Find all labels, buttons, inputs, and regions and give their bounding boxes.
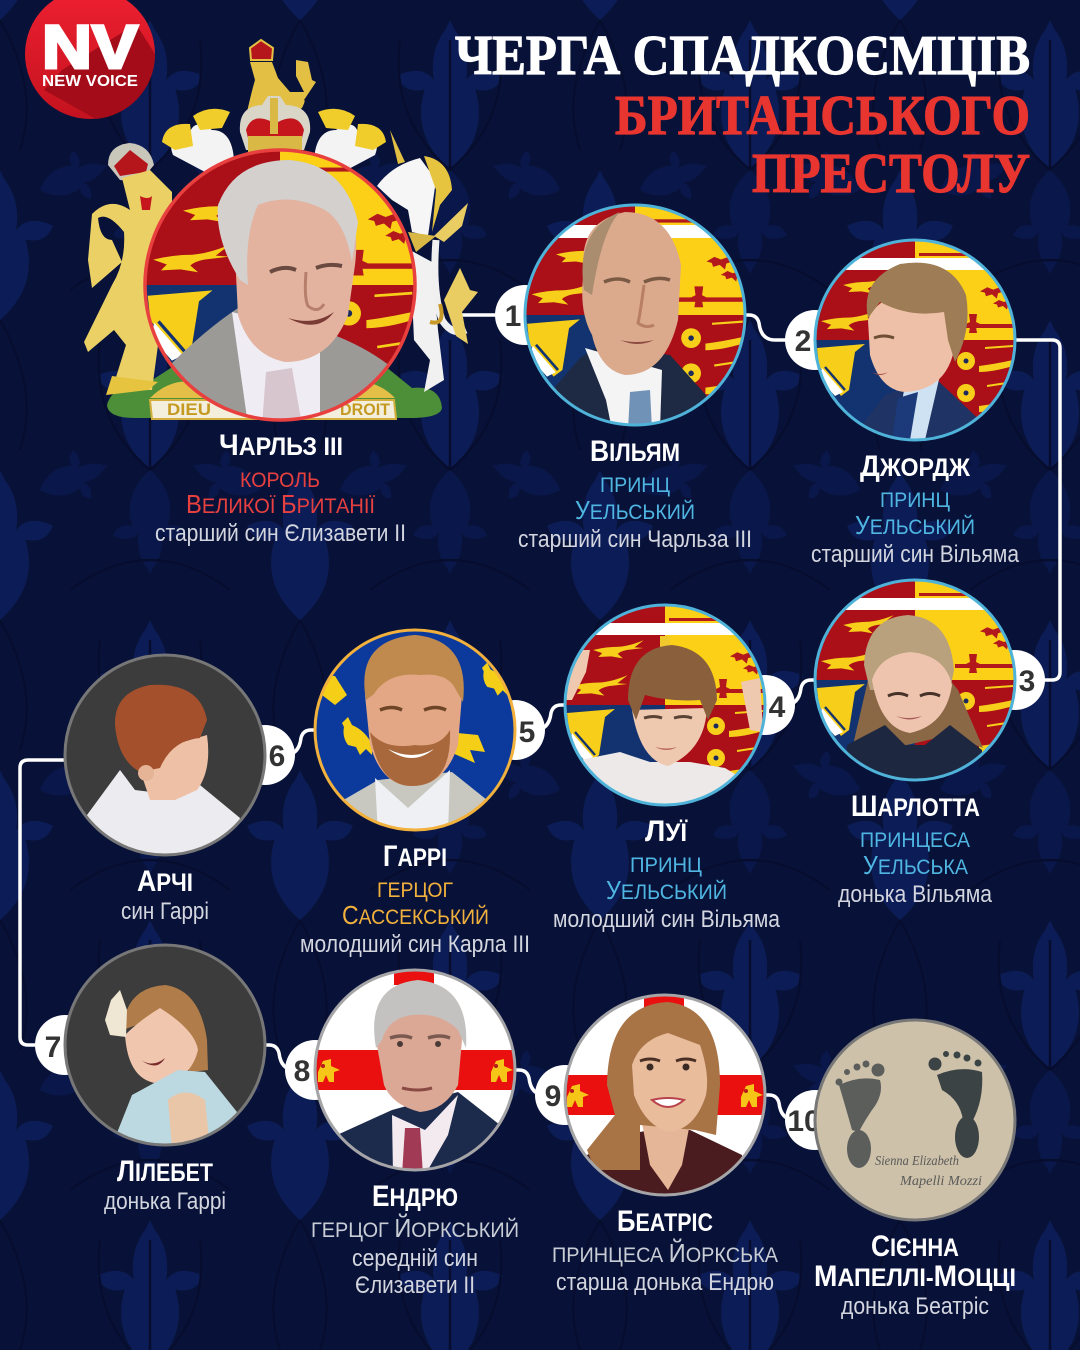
number badge 9: 9: [545, 1080, 561, 1113]
crest lion and crown: [240, 40, 316, 152]
person 10: Sienna: [785, 1020, 1016, 1320]
number badge 6: 6: [269, 740, 285, 773]
description: Andrew: [352, 1245, 478, 1299]
name: Charlotte: ШАРЛОТТА: [851, 790, 980, 823]
person 9: Beatrice: [535, 995, 779, 1296]
number badge 4: [735, 675, 795, 735]
ring: Archie: [65, 655, 265, 855]
role: William: ПРИНЦ: [600, 473, 670, 497]
logo: NV New Voice: NEW VOICE: [42, 73, 138, 90]
number badge 4: 4: [769, 691, 786, 724]
description: Louis: молодший син Вільяма: [553, 906, 781, 933]
role: Harry: САССЕКСЬКИЙ: [342, 902, 489, 930]
role: Charlotte: [860, 828, 971, 880]
role: Louis: ПРИНЦ: [630, 853, 702, 877]
description: Sienna: донька Беатріс: [841, 1293, 989, 1320]
name: William: ВІЛЬЯМ: [590, 435, 680, 468]
ring: William: [525, 205, 745, 425]
number badge 9: [535, 1065, 595, 1125]
role: William: УЕЛЬСЬКИЙ: [575, 497, 695, 525]
name: Sienna: МАПЕЛЛІ-МОЦЦІ: [814, 1260, 1016, 1293]
name: Archie: АРЧІ: [137, 865, 193, 898]
number badge 8: 8: [294, 1055, 310, 1088]
number badge 5: 5: [519, 716, 535, 749]
logo: NV New Voice: NV: [42, 13, 138, 81]
ring: Beatrice: [565, 995, 765, 1195]
person 4: Louis: [553, 605, 795, 933]
description: Andrew: середній син: [352, 1245, 478, 1272]
number badge 5: [485, 700, 545, 760]
ring: Andrew: [315, 970, 515, 1170]
coat of arms: [84, 40, 478, 419]
lion supporter: [84, 143, 172, 395]
ring: Sienna: [815, 1020, 1015, 1220]
description: George: старший син Вільяма: [811, 541, 1020, 568]
number badge 7: 7: [45, 1031, 61, 1064]
role: George: ПРИНЦ: [880, 488, 950, 512]
portrait: Lilibet: [65, 945, 265, 1148]
role: George: [855, 488, 975, 540]
person: Charles III: [145, 150, 415, 547]
portrait: footprints: Mapelli Mozzi: [899, 1174, 982, 1189]
number badge 10: [785, 1090, 845, 1150]
number badge 8: [285, 1040, 345, 1100]
description: Charlotte: донька Вільяма: [838, 881, 993, 908]
person 6: Archie: [65, 655, 295, 925]
number badge 2: [785, 310, 845, 370]
role: Charles: ВЕЛИКОЇ БРИТАНІЇ: [186, 491, 375, 519]
ring: Charles: [145, 150, 415, 420]
number badge 2: 2: [795, 325, 811, 358]
role: Andrew: ГЕРЦОГ ЙОРКСЬКИЙ: [311, 1213, 519, 1243]
role: Charlotte: ПРИНЦЕСА: [860, 828, 971, 852]
role: Louis: УЕЛЬСЬКИЙ: [606, 877, 727, 905]
number badge 7: [35, 1015, 95, 1075]
mantling leaves: [162, 109, 386, 172]
description: Charles: старший син Єлизавети II: [155, 520, 406, 547]
name: Harry: ГАРРІ: [383, 840, 447, 873]
logo: NV New Voice: [25, 0, 155, 119]
portrait: footprints: [815, 1020, 1015, 1220]
ring: Louis: [565, 605, 765, 805]
role: Harry: ГЕРЦОГ: [377, 878, 453, 902]
number badge 3: [985, 650, 1045, 710]
person 3: Charlotte: [815, 580, 1045, 908]
grass and motto banner: DROIT: [340, 400, 391, 419]
number badge 3: 3: [1019, 665, 1035, 698]
connector lines: [20, 315, 1060, 1120]
grass and motto banner: [107, 362, 442, 419]
number badge 10: 10: [787, 1105, 821, 1138]
description: William: старший син Чарльза III: [518, 526, 752, 553]
person 5: Harry: [300, 630, 545, 958]
person 2: George: [785, 240, 1020, 568]
number badge 1: 1: [505, 300, 521, 333]
description: Harry: молодший син Карла III: [300, 931, 530, 958]
portrait: Louis: [565, 605, 765, 810]
number badge 1: [495, 285, 555, 345]
grass and motto banner: DIEU: [167, 400, 211, 419]
description: Lilibet: донька Гаррі: [104, 1188, 226, 1215]
role: George: УЕЛЬСЬКИЙ: [855, 512, 975, 540]
ring: Charlotte: [815, 580, 1015, 780]
portrait: Charles: [145, 150, 415, 425]
ring: Lilibet: [65, 945, 265, 1145]
name: Louis: ЛУЇ: [645, 815, 688, 848]
role: Harry: [342, 878, 489, 930]
title: [455, 25, 1030, 205]
portrait: William: [525, 205, 745, 430]
portrait: Andrew: [315, 970, 515, 1175]
description: Archie: син Гаррі: [121, 898, 209, 925]
name: Beatrice: БЕАТРІС: [617, 1205, 713, 1238]
role: Charles: [186, 468, 375, 519]
number badge 6: [235, 725, 295, 785]
role: Beatrice: ПРИНЦЕСА ЙОРКСЬКА: [552, 1238, 779, 1268]
person 8: Andrew: [285, 970, 519, 1299]
title: БРИТАНСЬКОГО: [615, 85, 1030, 147]
name: Charles: ЧАРЛЬЗ III: [219, 429, 343, 462]
ring: George: [815, 240, 1015, 440]
name: Sienna: СІЄННА: [871, 1230, 959, 1263]
portrait: Harry: [315, 630, 515, 835]
person 1: William: [495, 205, 752, 553]
title: ПРЕСТОЛУ: [752, 143, 1030, 205]
title: ЧЕРГА СПАДКОЄМЦІВ: [455, 25, 1030, 87]
role: William: [575, 473, 695, 525]
ring: Harry: [315, 630, 515, 830]
name: Andrew: ЕНДРЮ: [372, 1180, 458, 1213]
portrait: George: [815, 240, 1015, 445]
role: Louis: [606, 853, 727, 905]
name: Sienna: [814, 1230, 1016, 1293]
role: Charlotte: УЕЛЬСЬКА: [863, 852, 969, 880]
role: Charles: КОРОЛЬ: [240, 468, 320, 492]
person 7: Lilibet: [35, 945, 265, 1215]
description: Andrew: Єлизавети II: [355, 1272, 475, 1299]
portrait: Archie: [65, 655, 265, 860]
portrait: Charlotte: [815, 580, 1015, 785]
portrait: footprints: Sienna Elizabeth: [875, 1154, 959, 1169]
name: Lilibet: ЛІЛЕБЕТ: [117, 1155, 213, 1188]
portrait: Beatrice: [565, 995, 765, 1200]
name: George: ДЖОРДЖ: [860, 450, 970, 483]
description: Beatrice: старша донька Ендрю: [556, 1269, 774, 1296]
unicorn supporter: [377, 130, 478, 392]
